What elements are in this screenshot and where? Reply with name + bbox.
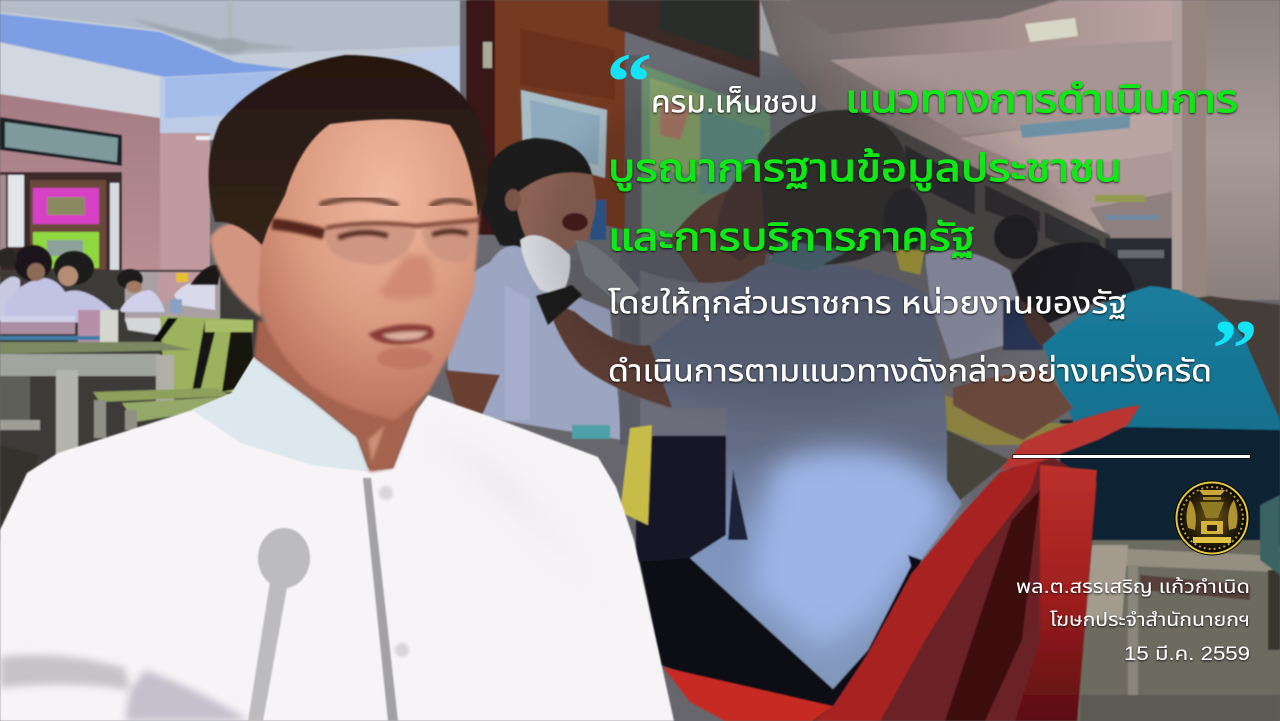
teal woman [945,242,1280,545]
credit name: พล.ต.สรรเสริญ แก้วกำเนิด [1016,575,1250,598]
neck highlight [368,425,385,462]
neck [254,320,440,472]
ceiling fan [130,0,300,54]
students in background right [883,188,1043,360]
face [258,105,480,420]
chair back panel [800,450,1097,721]
jacket placket [363,478,398,721]
central wall and door [460,0,800,260]
student behind, white uniform [620,185,790,450]
nose [378,255,434,300]
opening quotation mark: “ [606,36,652,127]
portrait of spokesperson [0,55,674,721]
hair [209,55,488,245]
left room: students and desks [0,245,262,540]
right ceiling and corridor [760,0,1280,510]
left room: ceiling and walls [0,0,470,283]
mouth [368,324,434,369]
body line 2: ดำเนินการตามแนวทางดังกล่าวอย่างเคร่งครัด [608,355,1212,388]
girl in school uniform [445,138,622,440]
red plastic chair [663,405,1140,721]
chair right slat [1015,465,1097,721]
soft vignette over photo [540,70,1060,410]
white jacket [0,357,674,721]
dental worker in blue shirt [520,110,961,708]
eyebrows [322,198,470,205]
chair top rim [1000,405,1140,470]
credit position: โฆษกประจำสำนักนายกฯ [1050,610,1250,631]
headline line 3: และการบริการภาครัฐ [608,217,975,259]
spokesperson credit [1016,575,1250,665]
jacket buttons [379,486,409,657]
floor and bench [1050,495,1280,721]
glasses [272,220,480,265]
closing quotation mark: ” [1212,303,1258,394]
body line 1: โดยให้ทุกส่วนราชการ หน่วยงานของรัฐ [608,287,1127,321]
headline line 1: แนวทางการดำเนินการ [845,79,1238,121]
microphone shadow [248,528,310,721]
ear [210,223,265,318]
chair seat [663,667,833,721]
government seal emblem [1174,480,1250,556]
chair inner slot [945,490,1040,721]
credit date: 15 มี.ค. 2559 [1124,644,1250,665]
headline line 2: บูรณาการฐานข้อมูลประชาชน [608,148,1122,191]
divider rule [1012,454,1251,459]
collar [192,357,370,472]
chair left rim [815,460,1040,721]
headline intro: ครม.เห็นชอบ [651,86,818,119]
quote panel [606,36,1258,394]
